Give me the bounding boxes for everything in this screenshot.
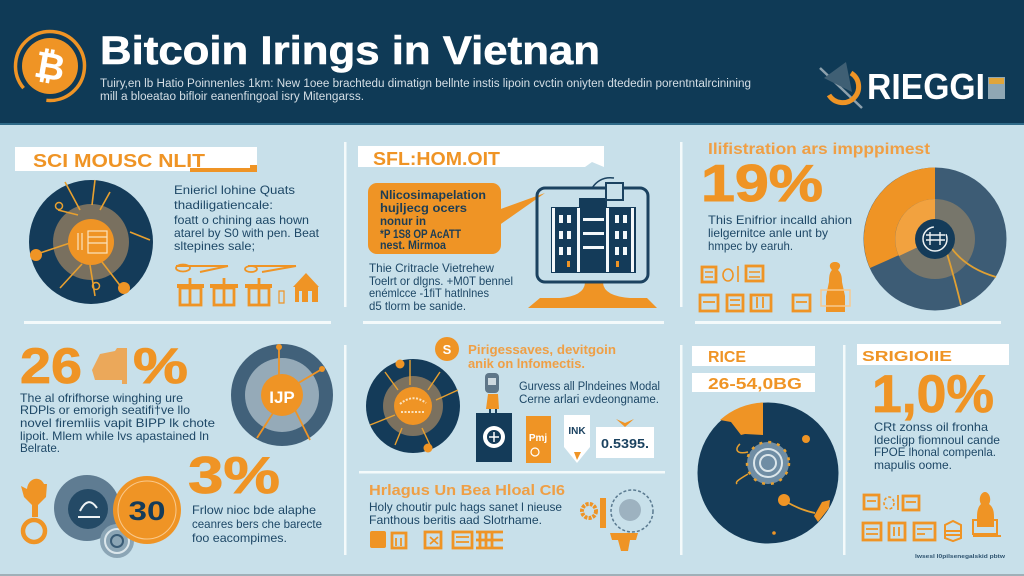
panel: top right	[700, 141, 1006, 312]
text block: The al ofrifhorse winghing ure	[20, 391, 183, 405]
pie chart	[864, 168, 1006, 310]
callout bubble	[368, 183, 545, 254]
text block: enémlcce -1fiT hatlnlnes	[369, 286, 489, 300]
overlapping coins	[54, 475, 181, 558]
icon row: mining rigs	[176, 264, 319, 305]
callout bubble: hujljecg ocers	[380, 203, 467, 215]
heading banner	[15, 147, 257, 172]
text block: Fanthous beritis aad Slotrhame.	[369, 513, 542, 527]
title: Bitcoin Irings in Vietnan	[100, 29, 600, 73]
text block: Cerne arlari evdeongname.	[519, 394, 659, 406]
big stat 26 4%: 26	[20, 338, 82, 394]
text block: Toelrt or dlgns. +M0T bennel	[369, 274, 513, 288]
white tag: INK	[568, 426, 586, 437]
orange card: Pmj	[529, 433, 547, 444]
heading banner	[857, 344, 1009, 365]
heading banner	[692, 346, 815, 366]
text block	[519, 381, 660, 406]
text block: This Enifrior incalld ahion	[708, 213, 852, 227]
icon: figure at laptop	[977, 492, 994, 527]
value box: 0.5395.	[601, 437, 649, 451]
text block: Gurvess all Plndeines Modal	[519, 381, 660, 393]
heading: anik on lnfomectis.	[468, 357, 585, 371]
callout bubble: nonur in	[380, 216, 426, 228]
heading: Hrlagus Un Bea Hloal CI6	[369, 482, 565, 499]
text block	[192, 503, 322, 545]
big stat 26 4%	[20, 338, 188, 394]
text block: CRt zonss oil fronha	[874, 420, 988, 434]
ring diagram	[231, 344, 333, 446]
value box	[596, 419, 654, 458]
icon row	[370, 531, 503, 548]
numbered badge	[435, 337, 459, 361]
text block: hmpec by earuh.	[708, 239, 793, 253]
heading banner: SCI MOUSC NLIT	[33, 150, 206, 171]
text block	[874, 420, 1000, 472]
icon grid	[863, 492, 1001, 541]
subtitle: mill a bloeatao bifloir eanenfingoal isry Mitengarss.	[100, 91, 364, 103]
text block	[708, 213, 852, 253]
logo: RIEGGI	[820, 62, 1005, 108]
text block: atarel by S0 with pen. Beat	[174, 226, 320, 240]
network circle	[29, 180, 153, 304]
text block	[369, 261, 513, 313]
callout bubble: *P 1S8 OP AcATT	[380, 229, 461, 241]
text block: sltepines sale;	[174, 239, 255, 253]
dark card	[476, 413, 512, 462]
text block	[20, 391, 215, 455]
network circle	[366, 359, 460, 453]
heading banner: SRIGIOIIE	[862, 348, 952, 365]
icon: bitcoin coin: ₿	[32, 44, 68, 89]
overlapping coins: 30	[128, 496, 166, 526]
text block: thadiligatiencale:	[174, 198, 273, 212]
text block: mapulis oome.	[874, 458, 952, 472]
callout bubble: nest. Mirmoa	[380, 240, 447, 252]
ring diagram: IJP	[269, 388, 295, 407]
big stat 1,0%: 1,0%	[872, 365, 994, 424]
heading: Pirigessaves, devitgoin	[468, 343, 616, 357]
monitor with data centre building	[528, 178, 657, 308]
panel: RICE	[692, 346, 838, 544]
panel: bottom middle	[366, 337, 660, 551]
pie with virus diagram	[698, 402, 838, 544]
panel: SRIGIOIIE	[857, 344, 1009, 560]
panel: top middle	[358, 146, 657, 313]
callout bubble: Nlicosimapelation	[380, 190, 486, 202]
panel: top left	[15, 147, 320, 305]
building	[551, 178, 636, 273]
heading banner: SFL:HOM.OIT	[373, 149, 500, 169]
icon grid	[700, 262, 850, 312]
subtitle: Tuiry,en lb Hatio Poinnenles 1km: New 1oee brachtedu dimatign bellnte instis lipoin cvctin oniyten dtededin porentntalrcinining	[100, 78, 751, 90]
text block: Thie Critracle Vietrehew	[369, 261, 494, 275]
value banner	[692, 373, 815, 393]
big stat 26 4%: %	[133, 338, 188, 394]
text block: foatt o chining aas hown	[174, 213, 309, 227]
icon: miner figure	[485, 373, 499, 416]
orange card	[526, 416, 551, 463]
text block: ceanres bers che barecte	[192, 517, 322, 531]
text block: d5 tlorm be sanide.	[369, 299, 466, 313]
numbered badge: S	[443, 342, 452, 357]
panel: bottom left	[20, 338, 333, 558]
value banner: 26-54,0BG	[708, 376, 802, 393]
text block: lipoit. Mlem while lvs apastained ln	[20, 429, 209, 443]
text block: Eniericl lohine Quats	[174, 183, 295, 197]
text block: FPOE lhonal compenla.	[874, 445, 996, 459]
footnote: lwsesl l0pilsenegalskid pbtw	[915, 554, 1006, 560]
heading	[468, 343, 616, 371]
heading banner	[358, 146, 604, 169]
heading banner: RICE	[708, 349, 746, 366]
big stat 19%: 19%	[701, 155, 823, 213]
logo: RIEGGI: RIEGGI	[867, 66, 985, 107]
text block: Belrate.	[20, 441, 60, 455]
text block: Holy choutir pulc hags sanet l nieuse	[369, 500, 562, 514]
icon: pendant ring	[21, 479, 47, 542]
white tag	[564, 415, 590, 463]
subtitle	[100, 78, 751, 103]
text block: ldecligp fiomnoul cande	[874, 433, 1000, 447]
text block: foo eacompimes.	[192, 531, 287, 545]
text block	[369, 500, 562, 527]
text block: novel firemliis vapit BIPP lk chote	[20, 416, 215, 430]
header band	[0, 0, 1024, 125]
icon: gear and globe	[582, 490, 653, 551]
text block: lielgernitce anle unt by	[708, 226, 828, 240]
text block: RDPls or emorigh seatifi†ve llo	[20, 403, 190, 417]
big stat 3%: 3%	[188, 447, 280, 505]
monitor stand	[528, 283, 657, 308]
dividers	[24, 142, 1001, 555]
heading: Ilifistration ars impppimest	[708, 141, 931, 158]
icon: bitcoin coin	[1, 17, 99, 115]
text block	[174, 183, 320, 253]
icon: figure at laptop	[826, 262, 845, 312]
text block: Frlow nioc bde alaphe	[192, 503, 316, 517]
